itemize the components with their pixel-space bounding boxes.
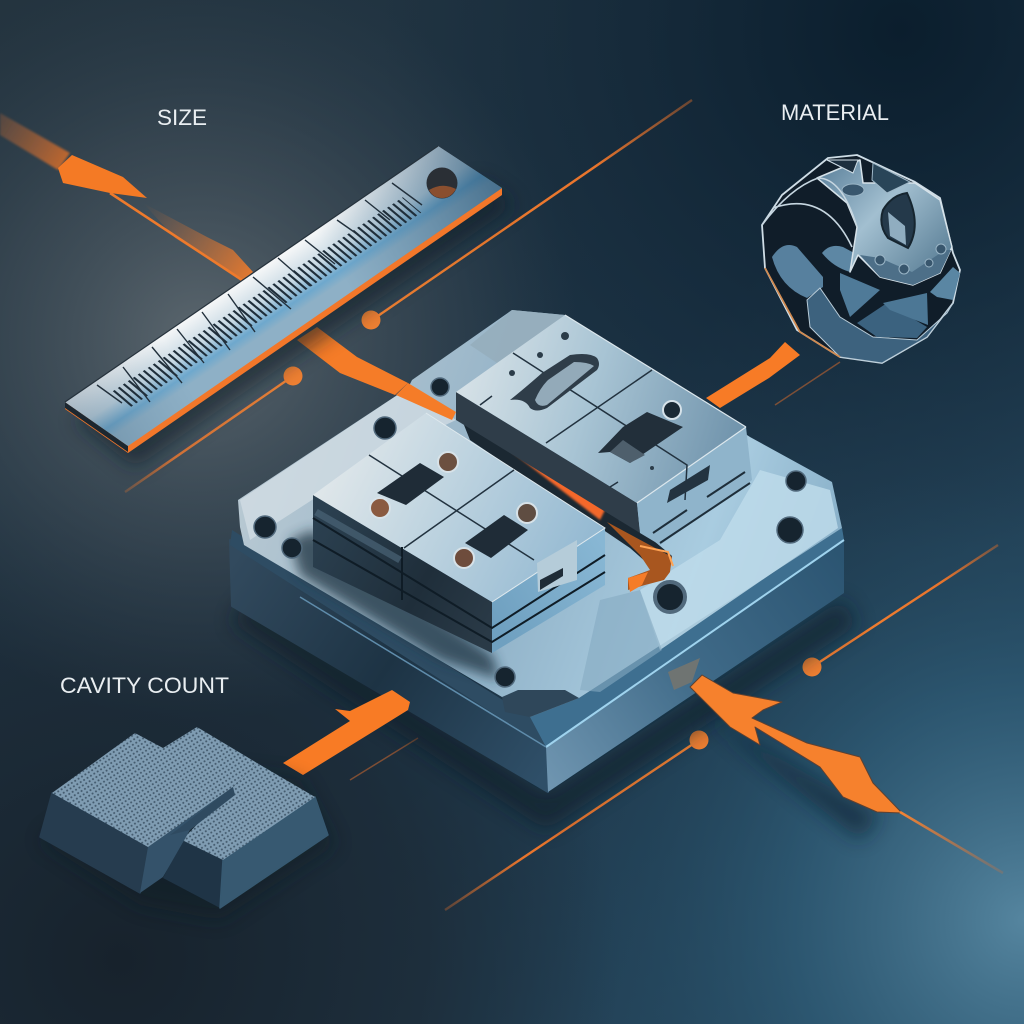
left block recess one (377, 463, 444, 505)
left block layer lines (313, 518, 605, 642)
right die block (456, 315, 752, 545)
mold base block (230, 528, 844, 792)
plate bolt holes (254, 378, 806, 687)
right block (163, 763, 328, 908)
thin connector: under ruler with dot (125, 366, 302, 492)
label: CAVITY COUNT: CAVITY COUNT (60, 673, 229, 698)
right block round hole (663, 401, 681, 419)
faint connectors near mold (350, 362, 840, 780)
plate corner chamfer (502, 690, 579, 717)
left block recess two (465, 515, 528, 558)
arrow: orange band from ruler to mold (297, 327, 408, 395)
grey notch at base front (668, 658, 700, 690)
arrow: lower-left orange pointer into mold (283, 690, 410, 775)
left block copper pins (370, 452, 537, 568)
left block (40, 727, 257, 893)
impeller hub band (860, 250, 951, 285)
mold assembly (230, 310, 850, 812)
right block window one (510, 354, 599, 410)
left block side bracket (537, 540, 577, 592)
orange molten channel (456, 405, 673, 592)
thin connector: right line with dot (802, 545, 998, 676)
right block seams (480, 353, 687, 500)
impeller hub bolts (842, 184, 946, 274)
thin connector: top centre line with dot (362, 100, 692, 330)
plate light facets (240, 310, 838, 692)
label: SIZE: SIZE (157, 105, 207, 130)
icon: ruler (65, 146, 515, 468)
left block seams (369, 455, 534, 560)
right block side slots (667, 465, 710, 503)
right block window two (598, 412, 683, 463)
right block small marks (509, 332, 654, 470)
impeller curved vanes (762, 178, 857, 247)
label: MATERIAL: MATERIAL (781, 100, 889, 125)
arrow: lower-right orange pointer from mold (690, 675, 1003, 873)
impeller hub (817, 160, 952, 285)
icon: impeller material sample (762, 155, 960, 363)
ruler long ticks (97, 183, 422, 403)
ruler hanging hole (426, 168, 458, 198)
arrow: orange band from mold to impeller (706, 342, 800, 408)
orange strip over plate edge (396, 383, 456, 420)
left die block (313, 413, 605, 653)
mold top plate (238, 310, 842, 717)
thin connector: bottom line with dot (445, 730, 708, 910)
arrow: top-left orange pointer leading to ruler (0, 113, 253, 280)
icon: cavity count blocks (40, 727, 335, 920)
impeller window (881, 193, 915, 248)
impeller lobes (772, 245, 960, 363)
shadow in front of left die block (290, 530, 500, 680)
plate edge highlights (300, 540, 844, 747)
ruler fine ticks (122, 205, 412, 399)
